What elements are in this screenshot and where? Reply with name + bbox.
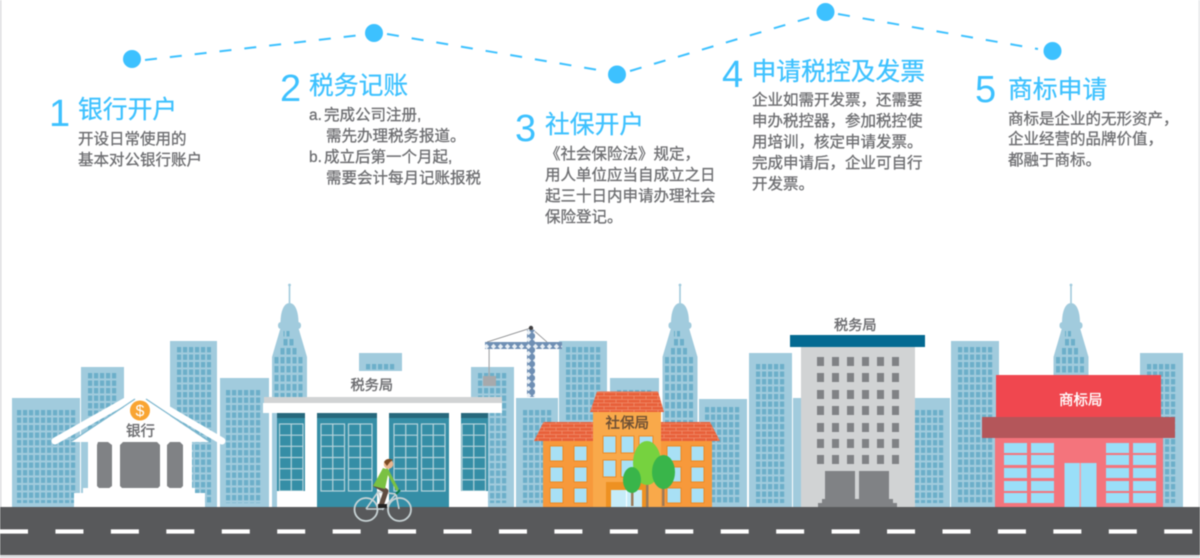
cyclist: [354, 459, 411, 521]
crane: [483, 326, 562, 397]
building: social security bureau: [534, 392, 720, 507]
step 4: tax control and invoices: 开发票。: [752, 175, 814, 193]
step 2: bookkeeping: a.: [309, 107, 322, 124]
building: tax bureau tower: 税务局: [834, 318, 877, 334]
building: tax bureau tower: [790, 318, 925, 507]
building: trademark office: 商标局: [1059, 392, 1102, 409]
step 4: tax control and invoices: 企业如需开发票，还需要: [752, 91, 923, 109]
step 5: trademark: 企业经营的品牌价值，: [1008, 130, 1163, 148]
step 4: tax control and invoices: 用培训，核定申请发票。: [752, 133, 923, 151]
step 2: bookkeeping: 税务记账: [309, 72, 408, 100]
step 4: tax control and invoices: [722, 54, 925, 193]
trees: [623, 441, 675, 507]
step 2: bookkeeping: 成立后第一个月起,: [324, 148, 452, 166]
step 1: bank account: [49, 93, 202, 169]
road: [0, 507, 1200, 558]
step 3: social insurance: 《社会保险法》规定，: [545, 145, 700, 163]
step 2: bookkeeping: b.: [309, 149, 322, 166]
step 5: trademark: [975, 69, 1179, 169]
step 1: bank account: 开设日常使用的: [78, 130, 187, 148]
step 4: tax control and invoices: 申请税控及发票: [752, 58, 925, 86]
step 5: trademark: 商标申请: [1008, 76, 1107, 104]
building: trademark office: [982, 375, 1175, 507]
step 5: trademark: 商标是企业的无形资产，: [1008, 110, 1179, 128]
step 1: bank account: 1: [49, 93, 70, 135]
step 1: bank account: 基本对公银行账户: [78, 151, 202, 169]
icon: dollar coin: [130, 400, 150, 420]
step 2: bookkeeping: 需要会计每月记账报税: [326, 169, 481, 187]
step 3: social insurance: 起三十日内申请办理社会: [545, 187, 716, 205]
building: bank: 银行: [126, 423, 155, 440]
step 2: bookkeeping: 2: [280, 68, 301, 110]
step 3: social insurance: 社保开户: [545, 111, 644, 139]
step 5: trademark: 5: [975, 69, 996, 111]
building: bank: [55, 393, 222, 507]
dashed timeline connecting the five steps: [123, 3, 1062, 84]
step 2: bookkeeping: 需先办理税务报道。: [326, 127, 466, 145]
icon: dollar coin: $: [136, 403, 145, 420]
step 2: bookkeeping: 完成公司注册,: [324, 106, 421, 124]
step 2: bookkeeping: [280, 68, 481, 187]
step 3: social insurance: 3: [515, 108, 536, 150]
step 5: trademark: 都融于商标。: [1008, 151, 1101, 169]
step 3: social insurance: 用人单位应当自成立之日: [545, 165, 716, 184]
step 3: social insurance: [515, 108, 716, 226]
step 3: social insurance: 保险登记。: [545, 208, 623, 226]
step 4: tax control and invoices: 4: [722, 54, 743, 96]
city skyline background: [12, 284, 1183, 508]
step 1: bank account: 银行开户: [78, 96, 177, 124]
building: tax bureau low-rise: [263, 378, 502, 507]
building: social security bureau: 社保局: [606, 415, 649, 432]
step 4: tax control and invoices: 完成申请后，企业可自行: [752, 154, 923, 172]
step 4: tax control and invoices: 申办税控器，参加税控使: [752, 112, 923, 130]
building: tax bureau low-rise: 税务局: [350, 378, 393, 394]
